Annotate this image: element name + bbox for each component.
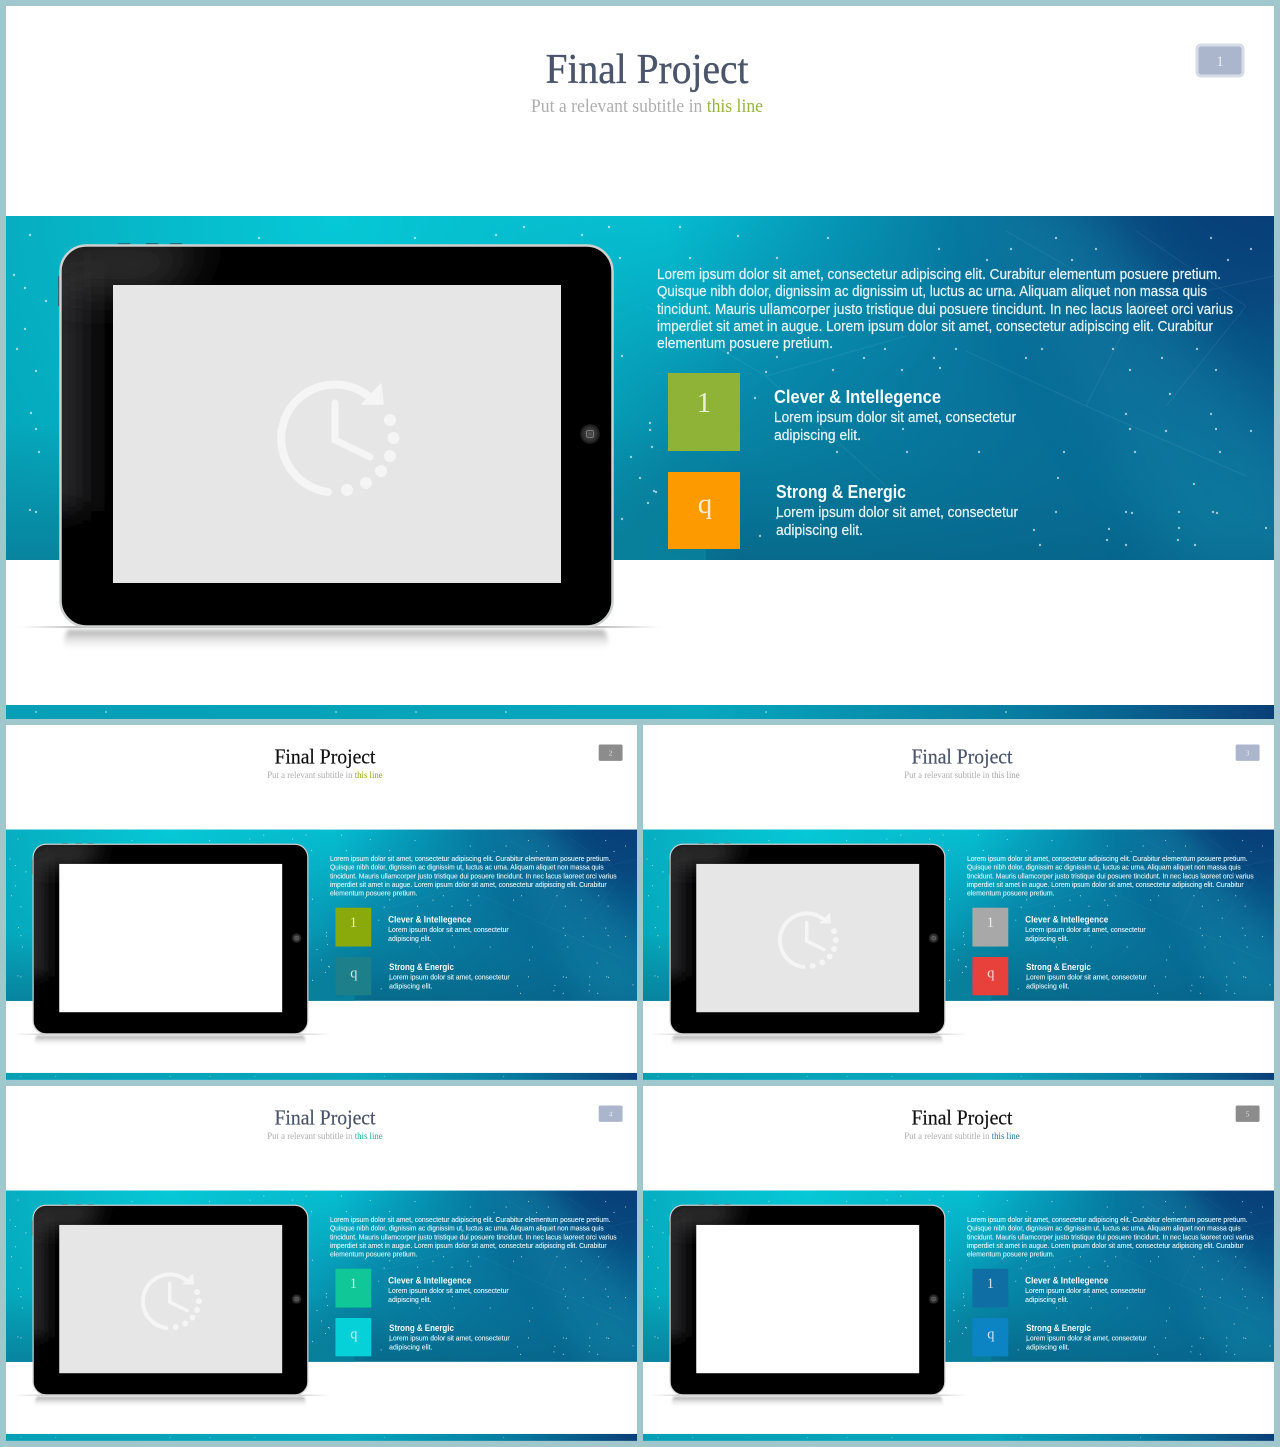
text: feature 2: Lorem ipsum dolor sit amet, consectetur <box>776 504 1018 521</box>
text: intro paragraph: imperdiet sit amet in augue. Lorem ipsum dolor sit amet, consectetur adipiscing elit. Curabitur <box>967 1241 1244 1250</box>
badge: slide number 4: 4 <box>609 1109 613 1118</box>
text: feature 1: Lorem ipsum dolor sit amet, consectetur <box>388 925 509 934</box>
text: feature 1: adipiscing elit. <box>1025 1295 1068 1304</box>
number tile 1: 1 <box>987 1276 994 1292</box>
text: feature 2: Strong & Energic <box>389 962 454 972</box>
text: feature 1: adipiscing elit. <box>774 427 861 444</box>
text: feature 1: adipiscing elit. <box>1025 934 1068 943</box>
text: feature 1 <box>388 915 509 943</box>
text: feature 2: adipiscing elit. <box>389 981 432 990</box>
text: feature 2: adipiscing elit. <box>1026 1342 1069 1351</box>
number tile 1 <box>668 373 740 451</box>
text: intro paragraph: Quisque nibh dolor, dignissim ac dignissim ut, luctus ac urna. Aliquam aliquet non massa quis <box>657 283 1207 300</box>
text: feature 2: Lorem ipsum dolor sit amet, consectetur <box>1026 972 1147 981</box>
text: feature 1: Clever & Intellegence <box>1025 1276 1108 1286</box>
text: slide 3 subtitle: Put a relevant subtitle in this line <box>904 771 1020 781</box>
text: feature 1: Clever & Intellegence <box>774 387 941 407</box>
panel: slide 4 variant <box>6 1086 637 1441</box>
text: intro paragraph: imperdiet sit amet in augue. Lorem ipsum dolor sit amet, consectetur adipiscing elit. Curabitur <box>330 880 607 889</box>
text: slide 5 subtitle: Put a relevant subtitle in this line <box>904 1132 1020 1142</box>
text: intro paragraph: Lorem ipsum dolor sit amet, consectetur adipiscing elit. Curabitur elementum posuere pretium. <box>967 1215 1248 1224</box>
text: slide 4 subtitle: Put a relevant subtitle in this line <box>267 1132 383 1142</box>
text: feature 1 <box>774 387 1016 444</box>
text: feature 2: Lorem ipsum dolor sit amet, consectetur <box>1026 1333 1147 1342</box>
number tile 2: q <box>987 1326 994 1342</box>
text: feature 2: Strong & Energic <box>1026 1323 1091 1333</box>
badge: slide number 2: 2 <box>609 748 613 757</box>
number tile 2: q <box>350 965 357 981</box>
text: feature 2: Lorem ipsum dolor sit amet, consectetur <box>389 1333 510 1342</box>
text: intro paragraph: Lorem ipsum dolor sit amet, consectetur adipiscing elit. Curabitur elementum posuere pretium. <box>657 266 1221 283</box>
icon: clock with arrow <box>780 913 836 967</box>
tablet device <box>13 1202 331 1408</box>
text: feature 2 <box>389 1323 510 1351</box>
number tile 1: 1 <box>987 915 994 931</box>
badge: slide number 5 <box>1236 1106 1260 1122</box>
number tile 2 <box>972 1318 1008 1356</box>
text: intro paragraph: elementum posuere pretium. <box>967 888 1055 897</box>
panel: starry gradient band <box>6 1181 653 1441</box>
icon: clock with arrow <box>143 1274 199 1328</box>
text: intro paragraph: Lorem ipsum dolor sit amet, consectetur adipiscing elit. Curabitur elementum posuere pretium. <box>330 1215 611 1224</box>
text: feature 2 <box>776 482 1018 539</box>
badge: slide number 3 <box>1236 745 1260 761</box>
text: intro paragraph <box>330 854 617 897</box>
text: feature 2: Strong & Energic <box>389 1323 454 1333</box>
text: feature 1 <box>388 1276 509 1304</box>
number tile 1: 1 <box>350 915 357 931</box>
text: intro paragraph: elementum posuere pretium. <box>330 888 418 897</box>
text: intro paragraph: imperdiet sit amet in augue. Lorem ipsum dolor sit amet, consectetur adipiscing elit. Curabitur <box>657 318 1213 335</box>
text: feature 1: Clever & Intellegence <box>388 915 471 925</box>
panel: slide 1 main <box>6 6 1274 719</box>
text: feature 1: adipiscing elit. <box>388 1295 431 1304</box>
number tile 2 <box>335 1318 371 1356</box>
text: intro paragraph: elementum posuere pretium. <box>657 335 833 352</box>
text: intro paragraph: imperdiet sit amet in augue. Lorem ipsum dolor sit amet, consectetur adipiscing elit. Curabitur <box>967 880 1244 889</box>
text: feature 1: Lorem ipsum dolor sit amet, consectetur <box>1025 1286 1146 1295</box>
text: feature 2: Lorem ipsum dolor sit amet, consectetur <box>389 972 510 981</box>
text: intro paragraph: Quisque nibh dolor, dignissim ac dignissim ut, luctus ac urna. Aliquam aliquet non massa quis <box>967 862 1241 871</box>
heading: slide 4 title: Final Project <box>274 1105 376 1129</box>
text: feature 1: Lorem ipsum dolor sit amet, consectetur <box>388 1286 509 1295</box>
panel: starry gradient band <box>6 196 1280 719</box>
text: slide 1 subtitle: Put a relevant subtitle in this line <box>531 96 763 117</box>
text: feature 2 <box>1026 1323 1147 1351</box>
text: feature 1: Lorem ipsum dolor sit amet, consectetur <box>774 409 1016 426</box>
icon: clock with arrow <box>281 384 394 492</box>
text: intro paragraph: Lorem ipsum dolor sit amet, consectetur adipiscing elit. Curabitur elementum posuere pretium. <box>330 854 611 863</box>
text: intro paragraph <box>967 1215 1254 1258</box>
badge: slide number 4 <box>599 1106 623 1122</box>
heading: slide 5 title: Final Project <box>911 1105 1013 1129</box>
badge: slide number 3: 3 <box>1246 748 1250 757</box>
text: feature 1: Clever & Intellegence <box>388 1276 471 1286</box>
number tile 2 <box>668 472 740 549</box>
text: intro paragraph: Quisque nibh dolor, dignissim ac dignissim ut, luctus ac urna. Aliquam aliquet non massa quis <box>330 862 604 871</box>
badge: slide number 5: 5 <box>1246 1109 1250 1118</box>
text: feature 2: Strong & Energic <box>776 482 906 502</box>
number tile 2: q <box>987 965 994 981</box>
text: intro paragraph <box>657 266 1233 352</box>
tablet device <box>13 841 331 1047</box>
text: intro paragraph <box>967 854 1254 897</box>
number tile 2 <box>335 957 371 995</box>
heading: slide 2 title: Final Project <box>274 744 376 768</box>
text: feature 1: adipiscing elit. <box>388 934 431 943</box>
text: slide 2 subtitle: Put a relevant subtitle in this line <box>267 771 383 781</box>
badge: slide number 1: 1 <box>1216 54 1224 70</box>
text: feature 1 <box>1025 915 1146 943</box>
panel: slide 2 variant <box>6 725 637 1080</box>
text: intro paragraph: Quisque nibh dolor, dignissim ac dignissim ut, luctus ac urna. Aliquam aliquet non massa quis <box>967 1223 1241 1232</box>
panel: starry gradient band <box>6 820 653 1080</box>
number tile 2: q <box>350 1326 357 1342</box>
tablet device <box>20 238 660 652</box>
badge: slide number 1 <box>1197 45 1243 76</box>
number tile 1: 1 <box>697 387 711 419</box>
panel: starry gradient band <box>643 820 1280 1080</box>
text: feature 1: Clever & Intellegence <box>1025 915 1108 925</box>
text: feature 2: adipiscing elit. <box>389 1342 432 1351</box>
number tile 1 <box>335 1269 371 1308</box>
number tile 1 <box>335 908 371 947</box>
heading: slide 3 title: Final Project <box>911 744 1013 768</box>
text: intro paragraph: elementum posuere pretium. <box>967 1249 1055 1258</box>
tablet device <box>650 1202 968 1408</box>
number tile 1: 1 <box>350 1276 357 1292</box>
tablet device <box>650 841 968 1047</box>
text: feature 2: Strong & Energic <box>1026 962 1091 972</box>
text: intro paragraph: imperdiet sit amet in augue. Lorem ipsum dolor sit amet, consectetur adipiscing elit. Curabitur <box>330 1241 607 1250</box>
heading: slide 1 title: Final Project <box>546 47 749 93</box>
number tile 2: q <box>698 488 712 520</box>
text: feature 2: adipiscing elit. <box>1026 981 1069 990</box>
text: intro paragraph: elementum posuere pretium. <box>330 1249 418 1258</box>
text: feature 2: adipiscing elit. <box>776 522 863 539</box>
badge: slide number 2 <box>599 745 623 761</box>
panel: slide 5 variant <box>643 1086 1274 1441</box>
text: feature 2 <box>389 962 510 990</box>
number tile 2 <box>972 957 1008 995</box>
number tile 1 <box>972 1269 1008 1308</box>
panel: slide 3 variant <box>643 725 1274 1080</box>
text: feature 1 <box>1025 1276 1146 1304</box>
text: feature 2 <box>1026 962 1147 990</box>
text: intro paragraph: Quisque nibh dolor, dignissim ac dignissim ut, luctus ac urna. Aliquam aliquet non massa quis <box>330 1223 604 1232</box>
text: feature 1: Lorem ipsum dolor sit amet, consectetur <box>1025 925 1146 934</box>
panel: starry gradient band <box>643 1181 1280 1441</box>
text: intro paragraph <box>330 1215 617 1258</box>
text: intro paragraph: Lorem ipsum dolor sit amet, consectetur adipiscing elit. Curabitur elementum posuere pretium. <box>967 854 1248 863</box>
number tile 1 <box>972 908 1008 947</box>
